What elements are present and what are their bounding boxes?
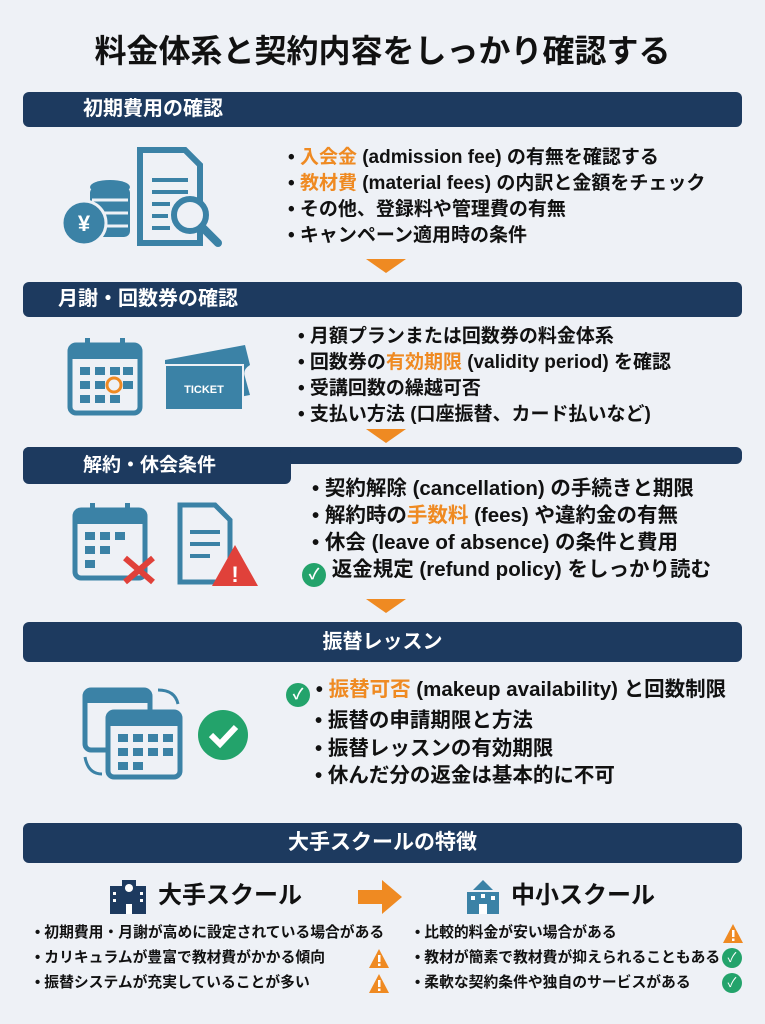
subhead: small school <box>467 880 655 914</box>
icon: calendar and ticket <box>68 338 250 416</box>
section bar: monthly fees: 月謝・回数券の確認 <box>58 288 238 310</box>
bullets: initial fees <box>288 146 705 246</box>
arrow <box>366 599 406 613</box>
list: small school: • 比較的料金が安い場合がある <box>415 925 617 941</box>
bullets: monthly fees: • 支払い方法 (口座振替、カード払いなど) <box>298 404 651 425</box>
icon: coins and document <box>64 147 222 247</box>
arrow <box>366 429 406 443</box>
list: major school: • 初期費用・月謝が高めに設定されている場合がある <box>35 925 384 941</box>
icon: calendar x and warning doc: ! <box>231 562 239 587</box>
bullets: cancellation: • 休会 (leave of absence) の条件と費用 <box>312 531 678 554</box>
status icons right <box>722 924 743 993</box>
list: major school: • 振替システムが充実していることが多い <box>35 975 310 991</box>
subhead: small school: 中小スクール <box>511 882 655 909</box>
bullets: makeup lessons: • 振替の申請期限と方法 <box>315 709 533 732</box>
list: major school <box>35 924 384 991</box>
list: major school: • カリキュラムが豊富で教材費がかかる傾向 <box>35 950 325 966</box>
section bar: cancellation (tab shape) <box>23 447 742 484</box>
status icons right: ✓ <box>728 975 736 990</box>
section bar: makeup lessons <box>23 622 742 662</box>
bullets: cancellation: • 解約時の手数料 (fees) や違約金の有無 <box>312 504 678 527</box>
bullets: makeup lessons: ✓ <box>293 686 303 703</box>
bullets: cancellation: ✓ <box>309 566 319 583</box>
icon: calendar x and warning doc <box>72 502 258 587</box>
bullets: initial fees: • 教材費 (material fees) の内訳と金額をチェック <box>288 173 705 194</box>
arrow: right <box>358 880 402 914</box>
warning icons left <box>369 949 389 993</box>
bullets: monthly fees <box>298 326 671 425</box>
bullets: cancellation <box>302 477 711 587</box>
bullets: initial fees: • 入会金 (admission fee) の有無を確認する <box>288 147 659 168</box>
section bar: monthly fees <box>23 282 742 317</box>
section bar: makeup lessons: 振替レッスン <box>322 631 442 653</box>
bullets: monthly fees: • 月額プランまたは回数券の料金体系 <box>298 326 614 347</box>
list: small school <box>415 924 720 991</box>
icon: calendar and ticket: TICKET <box>184 384 224 396</box>
section bar: cancellation (tab shape): 解約・休会条件 <box>83 455 216 476</box>
bullets: makeup lessons <box>286 678 726 787</box>
bullets: makeup lessons: • 振替可否 (makeup availability) と回数制限 <box>316 678 726 701</box>
bullets: initial fees: • その他、登録料や管理費の有無 <box>288 199 566 220</box>
icon: coins and document: ¥ <box>78 211 91 236</box>
section bar: major schools <box>23 823 742 863</box>
bullets: makeup lessons: • 休んだ分の返金は基本的に不可 <box>315 764 615 787</box>
bullets: monthly fees: • 受講回数の繰越可否 <box>298 378 481 399</box>
bullets: initial fees: • キャンペーン適用時の条件 <box>288 225 527 246</box>
section bar: initial fees: 初期費用の確認 <box>83 98 223 120</box>
bullets: makeup lessons: • 振替レッスンの有効期限 <box>315 736 553 760</box>
section bar: initial fees <box>23 92 742 127</box>
title: 料金体系と契約内容をしっかり確認する <box>94 33 670 69</box>
section bar: major schools: 大手スクールの特徴 <box>288 831 477 854</box>
list: small school: • 教材が簡素で教材費が抑えられることもある <box>415 950 720 966</box>
bullets: cancellation: 返金規定 (refund policy) をしっかり読む <box>332 558 711 581</box>
subhead: major school <box>110 880 302 914</box>
arrow <box>366 259 406 273</box>
icon: calendars and check <box>82 688 248 780</box>
subhead: major school: 大手スクール <box>158 882 302 909</box>
list: small school: • 柔軟な契約条件や独自のサービスがある <box>415 975 691 991</box>
status icons right: ✓ <box>728 950 736 965</box>
bullets: cancellation: • 契約解除 (cancellation) の手続きと期限 <box>312 477 694 500</box>
bullets: monthly fees: • 回数券の有効期限 (validity period) を確認 <box>298 352 671 373</box>
